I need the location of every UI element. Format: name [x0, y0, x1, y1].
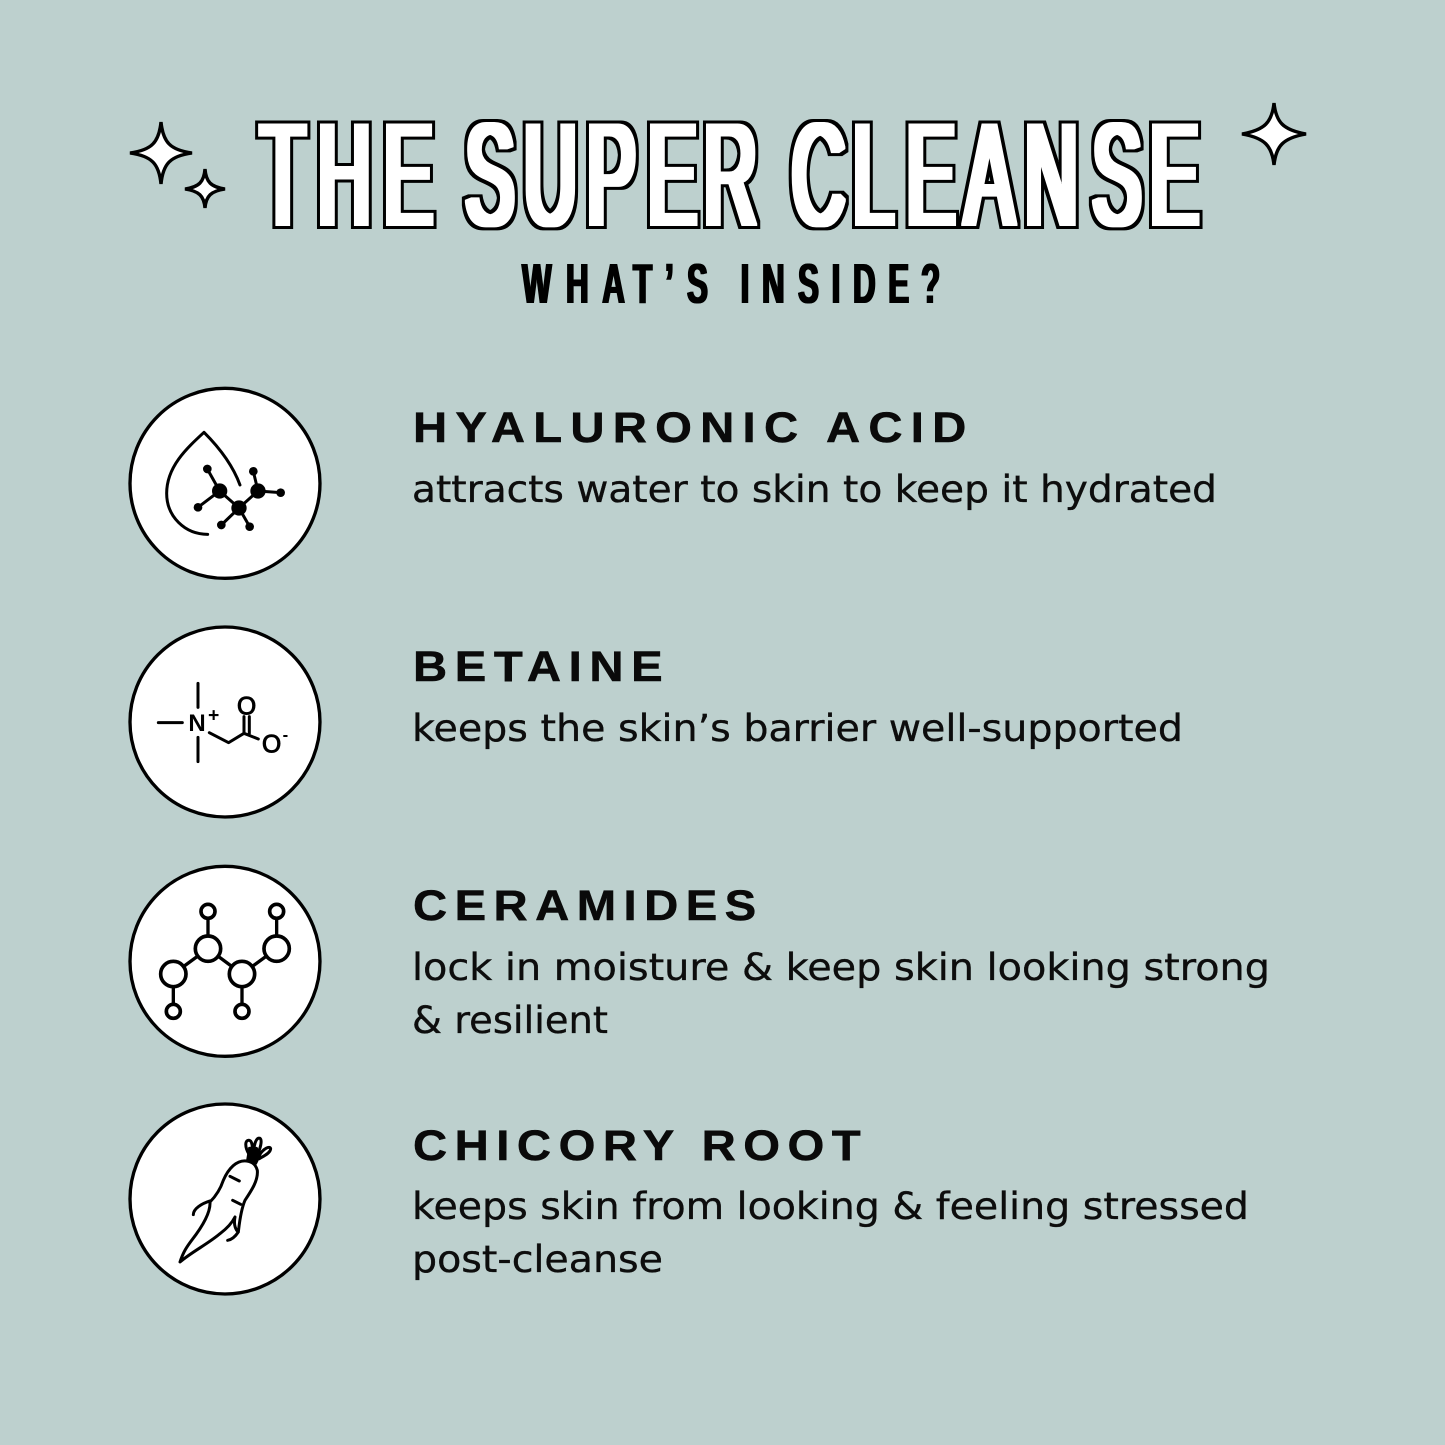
panel: betaine	[130, 627, 1183, 817]
icon: betaine formula: +	[208, 706, 219, 727]
icon: water drop with molecule	[130, 388, 320, 578]
description: ceramides second line: & resilient	[412, 999, 608, 1042]
heading: betaine: BETAINE	[413, 642, 663, 691]
panel: hyaluronic acid	[130, 388, 1217, 578]
icon: betaine formula: O	[237, 694, 256, 721]
heading: hyaluronic acid: HYALURONIC ACID	[413, 403, 966, 452]
icon: chicory root	[130, 1104, 320, 1294]
subtitle: WHAT’S INSIDE?	[522, 251, 940, 315]
icon: betaine formula: -	[283, 726, 288, 745]
icon: betaine formula: N	[188, 710, 206, 737]
description: hyaluronic acid: attracts water to skin to keep it hydrated	[412, 468, 1217, 511]
icon: ceramide chain	[130, 866, 320, 1056]
description: betaine: keeps the skin’s barrier well-supported	[412, 707, 1183, 750]
description: chicory root second line: post-cleanse	[412, 1238, 663, 1281]
description: chicory root: keeps skin from looking & feeling stressed	[412, 1185, 1249, 1228]
icon: large sparkle left	[130, 122, 192, 184]
icon: betaine formula: O	[262, 732, 281, 759]
description: ceramides: lock in moisture & keep skin looking strong	[412, 946, 1270, 989]
panel: ceramides	[130, 866, 1270, 1056]
title: THE SUPER CLEANSE	[260, 95, 1199, 257]
heading: chicory root: CHICORY ROOT	[413, 1121, 861, 1170]
icon: small sparkle left	[185, 169, 225, 208]
icon: betaine formula	[130, 627, 320, 817]
panel: chicory root	[130, 1104, 1249, 1294]
icon: sparkle right	[1242, 103, 1306, 165]
heading: ceramides: CERAMIDES	[413, 881, 756, 930]
